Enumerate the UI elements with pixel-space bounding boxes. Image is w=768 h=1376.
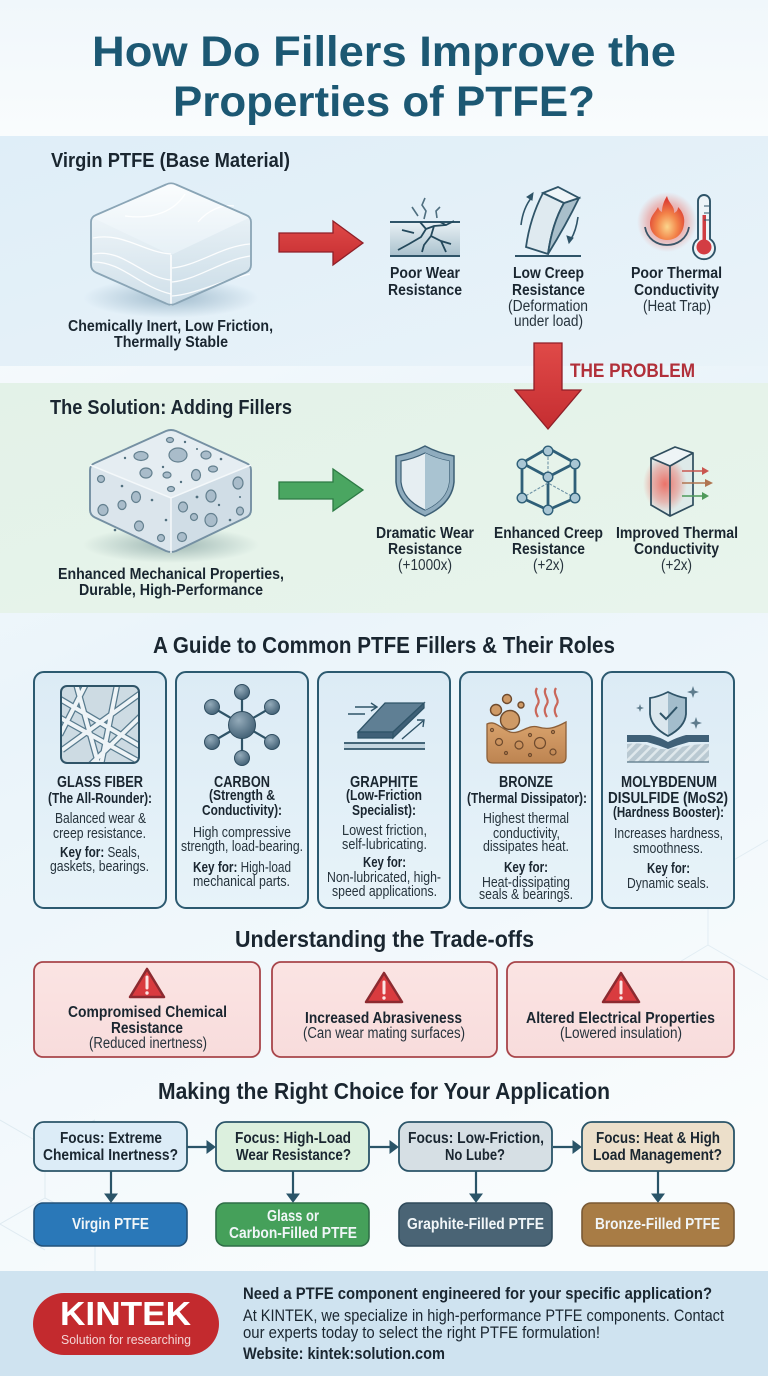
icon: bronze particles and heat bbox=[487, 688, 566, 763]
icon: graphite sliding plate bbox=[344, 703, 425, 749]
caption: virgin PTFE bbox=[68, 318, 273, 351]
text: dramatic wear bbox=[376, 525, 474, 574]
text: bronze: (Thermal Dissipator): bbox=[467, 790, 587, 807]
text: glass fiber: (The All-Rounder): bbox=[48, 790, 152, 807]
text: carbon: High compressive bbox=[193, 824, 291, 841]
text: graphite: Lowest friction, bbox=[342, 822, 427, 839]
text: poor thermal conductivity: Conductivity bbox=[634, 282, 719, 299]
text: compromised chemical resistance: Compromised Chemical bbox=[68, 1004, 227, 1021]
text: glass fiber bbox=[48, 774, 152, 875]
text: carbon: Conductivity): bbox=[202, 802, 282, 819]
text: bronze: Heat-dissipating bbox=[482, 874, 570, 891]
result: virgin PTFE: Virgin PTFE bbox=[72, 1216, 149, 1233]
text: improved thermal: Conductivity bbox=[634, 541, 719, 558]
text: improved thermal: (+2x) bbox=[661, 557, 692, 574]
callout: increased abrasiveness bbox=[272, 962, 497, 1057]
title: Properties of PTFE? bbox=[173, 78, 595, 126]
panel: the solution bbox=[0, 383, 768, 613]
text: enhanced creep bbox=[494, 525, 603, 574]
heading: trade-offs: Understanding the Trade-offs bbox=[235, 926, 534, 952]
text: graphite: Non-lubricated, high- bbox=[327, 869, 441, 886]
text: low creep: (Deformation bbox=[508, 298, 588, 315]
text: graphite: Key for: bbox=[363, 854, 406, 871]
box: focus wear resistance bbox=[216, 1122, 369, 1171]
result: glass or carbon filled bbox=[216, 1203, 369, 1246]
text: altered electrical properties bbox=[526, 1010, 715, 1042]
text: call to action: our experts today to select the right PTFE formulation! bbox=[243, 1324, 600, 1342]
callout: altered electrical properties bbox=[507, 962, 734, 1057]
text: poor wear bbox=[388, 265, 462, 299]
text: molybdenum disulfide: Increases hardness, bbox=[614, 825, 723, 842]
caption: virgin PTFE: Chemically Inert, Low Friction, bbox=[68, 318, 273, 335]
text: call to action: Website: kintek:solution.com bbox=[243, 1344, 445, 1363]
text: dramatic wear: Dramatic Wear bbox=[376, 525, 474, 542]
heading: right choice: Making the Right Choice for Your Application bbox=[158, 1078, 610, 1104]
icon: low creep bbox=[515, 187, 581, 256]
panel: virgin PTFE bbox=[0, 136, 768, 366]
text: bronze: Key for: bbox=[504, 859, 548, 876]
card: graphite bbox=[318, 672, 450, 908]
caption: the solution: Enhanced Mechanical Properties, bbox=[58, 566, 284, 583]
text: increased abrasiveness: Increased Abrasiveness bbox=[305, 1010, 462, 1027]
box: focus heat management: Focus: Heat & High bbox=[596, 1130, 720, 1147]
box: focus chemical inertness: Focus: Extreme bbox=[60, 1130, 162, 1147]
text: compromised chemical resistance bbox=[68, 1004, 227, 1052]
text: enhanced creep: Enhanced Creep bbox=[494, 525, 603, 542]
text: altered electrical properties: (Lowered insulation) bbox=[560, 1025, 682, 1042]
text: low creep: Resistance bbox=[512, 282, 585, 299]
title: How Do Fillers Improve the bbox=[92, 28, 676, 76]
text: carbon: mechanical parts. bbox=[193, 873, 290, 890]
text: bronze: seals & bearings. bbox=[479, 886, 573, 903]
text: poor wear: Resistance bbox=[388, 282, 462, 299]
text: bronze bbox=[467, 774, 587, 903]
text: enhanced creep: Resistance bbox=[512, 541, 585, 558]
box: focus chemical inertness bbox=[34, 1122, 187, 1171]
text: glass fiber: GLASS FIBER bbox=[57, 774, 143, 791]
box: focus low friction bbox=[399, 1122, 552, 1171]
text: poor thermal conductivity bbox=[631, 265, 722, 315]
text: low creep: Low Creep bbox=[513, 265, 584, 282]
text: bronze: Highest thermal bbox=[483, 810, 569, 827]
text: altered electrical properties: Altered Electrical Properties bbox=[526, 1010, 715, 1027]
text: compromised chemical resistance: (Reduced inertness) bbox=[89, 1035, 207, 1052]
caption: the solution bbox=[58, 566, 284, 599]
text: poor wear: Poor Wear bbox=[390, 265, 460, 282]
arrow: green right bbox=[279, 469, 363, 511]
text: graphite: GRAPHITE bbox=[350, 774, 418, 791]
text: enhanced creep: (+2x) bbox=[533, 557, 564, 574]
heading: the solution: The Solution: Adding Fillers bbox=[50, 397, 292, 419]
arrows: between focus boxes bbox=[105, 1141, 664, 1202]
text: graphite bbox=[327, 774, 441, 900]
text: glass fiber: Key for: Seals, bbox=[60, 844, 140, 861]
text: molybdenum disulfide: DISULFIDE (MoS2) bbox=[608, 790, 728, 807]
arrow: red right bbox=[279, 221, 363, 265]
card: glass fiber bbox=[34, 672, 166, 908]
icon: hardness shield bbox=[627, 686, 709, 762]
footer bbox=[0, 1271, 768, 1376]
card: carbon bbox=[176, 672, 308, 908]
result: glass or carbon filled: Carbon-Filled PTFE bbox=[229, 1225, 357, 1242]
icon: warning triangle bbox=[603, 973, 639, 1002]
logo: KINTEK bbox=[33, 1293, 219, 1355]
text: bronze: dissipates heat. bbox=[483, 838, 569, 855]
text: glass fiber: Balanced wear & bbox=[55, 810, 146, 827]
icon: lattice bbox=[517, 446, 580, 515]
icon: filled PTFE block bbox=[83, 429, 259, 563]
title bbox=[0, 0, 768, 136]
box: focus heat management bbox=[582, 1122, 734, 1171]
text: increased abrasiveness bbox=[303, 1010, 465, 1042]
text: glass fiber: gaskets, bearings. bbox=[50, 858, 149, 875]
text: graphite: self-lubricating. bbox=[342, 836, 427, 853]
arrow: the problem, red down bbox=[515, 343, 581, 429]
text: graphite: Specialist): bbox=[352, 802, 416, 819]
text: call to action: Need a PTFE component engineered for your specific application? bbox=[243, 1284, 712, 1303]
text: poor thermal conductivity: Poor Thermal bbox=[631, 265, 722, 282]
text: carbon: strength, load-bearing. bbox=[181, 838, 303, 855]
text: carbon: Key for: High-load bbox=[193, 859, 291, 876]
text: call to action bbox=[243, 1284, 724, 1363]
text: carbon bbox=[181, 774, 303, 890]
text: poor thermal conductivity: (Heat Trap) bbox=[643, 298, 711, 315]
result: bronze filled bbox=[582, 1203, 734, 1246]
text: dramatic wear: Resistance bbox=[388, 541, 462, 558]
heading: virgin PTFE: Virgin PTFE (Base Material) bbox=[51, 150, 290, 172]
icon: poor thermal conductivity bbox=[637, 192, 715, 259]
result: glass or carbon filled: Glass or bbox=[267, 1208, 319, 1225]
logo: KINTEK: KINTEK bbox=[60, 1295, 191, 1332]
text: molybdenum disulfide: Dynamic seals. bbox=[627, 875, 709, 892]
icon: warning triangle bbox=[366, 973, 402, 1002]
box: focus wear resistance: Focus: High-Load bbox=[235, 1130, 351, 1147]
icon: thermal block bbox=[643, 447, 713, 516]
icon: virgin PTFE block bbox=[83, 182, 259, 318]
flowchart: application choices bbox=[34, 1122, 734, 1246]
text: bronze: conductivity, bbox=[493, 825, 560, 842]
text: low creep bbox=[508, 265, 588, 330]
icon: carbon molecule bbox=[204, 684, 280, 766]
icon: shield bbox=[396, 446, 454, 516]
text: carbon: (Strength & bbox=[209, 787, 275, 804]
text: graphite: (Low-Friction bbox=[346, 787, 422, 804]
text: low creep: under load) bbox=[514, 313, 583, 330]
icon: poor wear bbox=[390, 198, 460, 256]
result: graphite filled: Graphite-Filled PTFE bbox=[407, 1216, 544, 1233]
text: molybdenum disulfide: Key for: bbox=[647, 860, 690, 877]
box: focus low friction: No Lube? bbox=[445, 1147, 505, 1164]
result: bronze filled: Bronze-Filled PTFE bbox=[595, 1216, 720, 1233]
box: focus wear resistance: Wear Resistance? bbox=[236, 1147, 351, 1164]
box: focus low friction: Focus: Low-Friction, bbox=[408, 1130, 544, 1147]
label: the problem: THE PROBLEM bbox=[570, 361, 695, 382]
text: improved thermal: Improved Thermal bbox=[616, 525, 738, 542]
card: molybdenum disulfide bbox=[602, 672, 734, 908]
logo: KINTEK: Solution for researching bbox=[61, 1332, 191, 1347]
caption: the solution: Durable, High-Performance bbox=[79, 582, 263, 599]
text: improved thermal bbox=[616, 525, 738, 574]
caption: virgin PTFE: Thermally Stable bbox=[114, 334, 228, 351]
result: virgin PTFE bbox=[34, 1203, 187, 1246]
text: molybdenum disulfide: MOLYBDENUM bbox=[621, 774, 717, 791]
icon: warning triangle bbox=[130, 969, 164, 997]
text: graphite: speed applications. bbox=[332, 883, 437, 900]
icon: glass fiber mesh bbox=[60, 685, 140, 764]
card: bronze bbox=[460, 672, 592, 908]
callout: compromised chemical resistance bbox=[34, 962, 260, 1057]
text: carbon: CARBON bbox=[214, 774, 270, 791]
text: compromised chemical resistance: Resistance bbox=[111, 1020, 183, 1037]
heading: guide to fillers: A Guide to Common PTFE Fillers & Their Roles bbox=[153, 632, 615, 658]
text: increased abrasiveness: (Can wear mating surfaces) bbox=[303, 1025, 465, 1042]
text: molybdenum disulfide bbox=[608, 774, 728, 892]
text: molybdenum disulfide: smoothness. bbox=[633, 840, 703, 857]
text: molybdenum disulfide: (Hardness Booster): bbox=[613, 804, 724, 821]
text: glass fiber: creep resistance. bbox=[53, 825, 146, 842]
box: focus heat management: Load Management? bbox=[593, 1147, 722, 1164]
text: dramatic wear: (+1000x) bbox=[398, 557, 452, 574]
text: bronze: BRONZE bbox=[499, 774, 553, 791]
result: graphite filled bbox=[399, 1203, 552, 1246]
box: focus chemical inertness: Chemical Inertness? bbox=[43, 1147, 178, 1164]
